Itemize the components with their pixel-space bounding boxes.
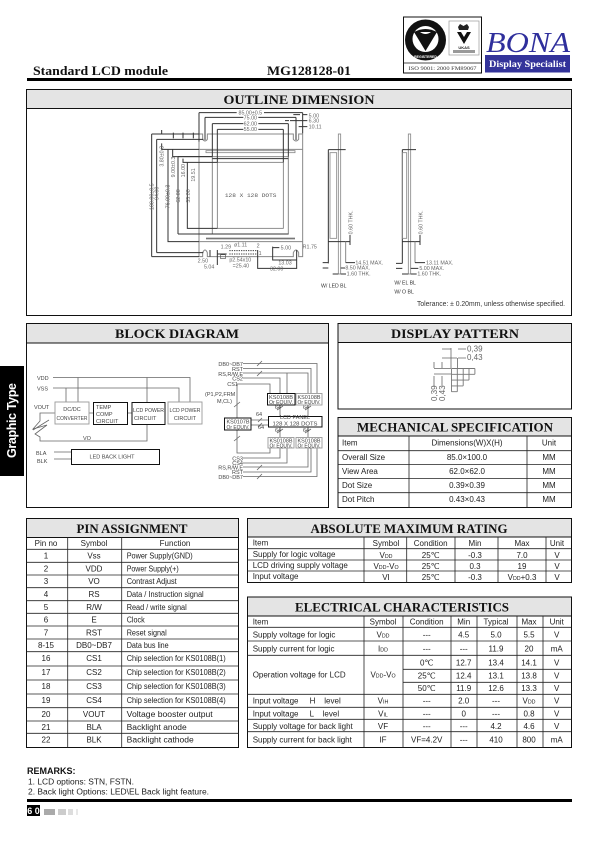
dot pattern diagram: 0,43 xyxy=(467,353,483,362)
pin table: CS4 xyxy=(86,696,102,705)
pin table: 17 xyxy=(42,668,51,677)
electrical table: Operation voltage for LCD xyxy=(253,670,346,680)
power and converter circuit: DC/DC xyxy=(63,407,81,413)
backlight circuit: BLA xyxy=(36,451,47,457)
pin table: 8-15 xyxy=(38,641,55,650)
page number tag: 6 0 xyxy=(27,806,40,816)
electrical table: 14.1 xyxy=(521,659,537,668)
pin table: BLK xyxy=(86,736,102,744)
rating table: VI xyxy=(382,573,390,582)
electrical table: V xyxy=(554,696,560,706)
driver circuit xyxy=(205,361,322,481)
driver circuit: KS0108B xyxy=(269,395,293,401)
backlight circuit xyxy=(36,450,160,465)
electrical table: VDD-VO xyxy=(370,670,396,680)
rating table: Symbol xyxy=(373,539,400,548)
electrical table: 13.3 xyxy=(521,684,537,693)
pin table: Backlight cathode xyxy=(127,736,194,744)
dot pattern diagram: 0,39 xyxy=(467,344,483,354)
heading: mechanical specification xyxy=(338,418,572,436)
electrical table: Supply current for back light xyxy=(253,736,353,744)
header title: model number: MG128128-01 xyxy=(267,64,351,78)
driver circuit: 64 xyxy=(303,405,309,411)
electrical table: VIH xyxy=(378,696,388,706)
electrical table: VDD xyxy=(376,630,390,640)
front view drawing: R1.75 xyxy=(303,244,317,250)
electrical table: 25℃ xyxy=(418,672,436,681)
side view with LED backlight: 0.60 THK. xyxy=(348,210,354,234)
panel: absolute maximum rating xyxy=(248,518,572,582)
power and converter circuit: VO xyxy=(83,436,92,442)
BONA logo: Display Specialist xyxy=(489,60,567,70)
driver circuit: Or EQUIV. xyxy=(298,400,321,406)
electrical table: 4.6 xyxy=(523,722,535,731)
heading: absolute maximum rating xyxy=(248,518,572,537)
electrical table: 12.7 xyxy=(456,659,472,668)
driver circuit: KS0108B xyxy=(298,438,321,444)
electrical table: 12.4 xyxy=(456,672,472,681)
side view with LED backlight: 1.60 THK. xyxy=(347,272,371,278)
mechanical table: 0.43×0.43 xyxy=(449,495,485,504)
pin table: 20 xyxy=(42,710,51,719)
electrical table: --- xyxy=(423,722,431,731)
side tab: graphic type xyxy=(0,366,24,476)
pin table: 5 xyxy=(44,603,49,612)
rating table: Max xyxy=(514,539,530,548)
front view drawing: 5.04 xyxy=(204,265,214,271)
electrical table: VDD xyxy=(522,696,536,706)
front view drawing: 3.80±0.3 xyxy=(159,146,165,167)
certification logo box: UKAS xyxy=(458,45,470,50)
driver circuit: RS,R/W,E xyxy=(218,372,243,378)
front view drawing: 5.00 xyxy=(281,245,291,251)
electrical table: V xyxy=(554,659,560,668)
pin table: Reset signal xyxy=(127,628,167,638)
backlight circuit: LED BACK LIGHT xyxy=(90,454,135,460)
driver circuit: DB0~DB7 xyxy=(218,362,243,368)
pin table: Vss xyxy=(87,552,101,560)
electrical table: --- xyxy=(423,630,431,640)
driver circuit: 64 xyxy=(275,405,281,411)
rating table: Unit xyxy=(550,539,565,548)
power and converter circuit: VSS xyxy=(37,386,48,392)
front view drawing: 55.00 xyxy=(186,189,192,203)
electrical table: V xyxy=(554,672,560,681)
power and converter circuit: CIRCUIT xyxy=(174,416,197,422)
mechanical table: MM xyxy=(542,467,556,476)
tolerance note: Tolerance: ± 0.20mm, unless otherwise specified. xyxy=(417,301,565,308)
front view drawing: ø1.11 xyxy=(234,243,247,249)
electrical table: Item xyxy=(253,618,269,626)
front view drawing: 1 xyxy=(259,251,262,257)
front view drawing: 19.51 xyxy=(191,168,197,182)
electrical table: 13.8 xyxy=(521,672,537,681)
driver circuit: KS0108B xyxy=(298,395,321,401)
pin table: Data bus line xyxy=(127,641,169,650)
mechanical table: Dot Pitch xyxy=(342,495,374,504)
side view with EL or no backlight: 13.11 MAX. xyxy=(426,260,453,266)
front view drawing: 5.00 xyxy=(309,113,319,119)
electrical table: 0 xyxy=(461,710,466,718)
rating table: Input voltage xyxy=(253,572,299,581)
front view drawing: 1.29 xyxy=(221,244,231,250)
electrical table: --- xyxy=(423,696,431,706)
rating table: LCD driving supply voltage xyxy=(253,561,348,570)
electrical table: V xyxy=(554,684,560,693)
pin table: Chip selection for KS0108B(4) xyxy=(127,696,226,705)
pin table: CS1 xyxy=(86,654,102,663)
heading: display pattern xyxy=(338,324,572,342)
electrical table: Input voltage H level xyxy=(253,696,341,706)
pin table: Contrast Adjust xyxy=(127,577,177,586)
mechanical table: MM xyxy=(542,453,556,462)
rating table: 25℃ xyxy=(422,573,440,582)
power and converter circuit: LCD POWER xyxy=(133,408,164,414)
heading: pin assignment xyxy=(26,518,238,538)
electrical table: --- xyxy=(492,710,500,718)
pin table: 21 xyxy=(42,723,51,732)
electrical table: 2.0 xyxy=(458,696,470,706)
pin table: E xyxy=(91,616,97,625)
front view drawing: 13.03 xyxy=(278,261,292,267)
front view drawing: 55.00 xyxy=(244,127,257,133)
dot pattern diagram: 0,43 xyxy=(438,385,447,401)
power and converter circuit: TEMP xyxy=(96,405,112,411)
electrical table: 50℃ xyxy=(418,684,436,693)
electrical table: 4.5 xyxy=(458,630,470,640)
remarks: 2. Back light Options: LED\EL Back light feature. xyxy=(28,788,209,796)
electrical table: 5.0 xyxy=(490,630,502,640)
heading: outline dimension xyxy=(26,90,572,108)
electrical table: 13.4 xyxy=(488,659,504,668)
pin table: CS3 xyxy=(86,682,102,691)
driver circuit: M,CL) xyxy=(217,399,232,405)
pin table: Read / write signal xyxy=(127,603,187,612)
rating table: 25℃ xyxy=(422,562,440,571)
pin table: DB0~DB7 xyxy=(76,641,112,650)
power and converter circuit: CIRCUIT xyxy=(134,416,157,422)
remarks: 1. LCD options: STN, FSTN. xyxy=(28,778,134,786)
pin table: Chip selection for KS0108B(1) xyxy=(127,654,226,663)
front view drawing: =25.40 xyxy=(233,263,249,269)
electrical table: mA xyxy=(551,736,563,744)
panel: outline dimension xyxy=(26,90,572,316)
front view drawing: 76.00±0.3 xyxy=(165,185,171,208)
heading: electrical characteristics xyxy=(248,597,572,616)
BONA logo xyxy=(485,27,570,72)
front view drawing: 75.00 xyxy=(244,116,257,122)
side view with EL or no backlight xyxy=(394,134,453,295)
rating table: 19 xyxy=(518,562,527,571)
electrical table: V xyxy=(554,630,560,640)
driver circuit: DB0~DB7 xyxy=(218,475,243,481)
electrical table: 800 xyxy=(522,736,536,744)
front view drawing: 85.00±0.5 xyxy=(238,110,262,116)
rating table: Item xyxy=(253,538,269,548)
rating table: Supply for logic voltage xyxy=(253,550,336,559)
rating table xyxy=(253,538,565,582)
electrical table: Supply voltage for back light xyxy=(253,722,354,731)
pin table: Power Supply(GND) xyxy=(127,552,193,560)
header title: product type: Standard LCD module xyxy=(33,64,168,78)
electrical table: Symbol xyxy=(370,618,397,626)
electrical table: Min xyxy=(457,618,470,626)
panel: pin assignment xyxy=(26,518,238,748)
electrical table: 0℃ xyxy=(420,659,433,668)
power and converter circuit xyxy=(33,376,202,442)
mechanical table: Dot Size xyxy=(342,481,373,490)
side view with EL or no backlight: 5.00 MAX. xyxy=(419,266,444,272)
electrical table: 0.8 xyxy=(523,710,535,718)
driver circuit: CS2 xyxy=(232,376,243,382)
pin table: Voltage booster output xyxy=(127,710,214,719)
mechanical table: Unit xyxy=(542,438,557,447)
electrical table: 410 xyxy=(489,736,503,744)
electrical table: 11.9 xyxy=(456,684,472,693)
driver circuit: RST xyxy=(232,470,244,476)
driver circuit: Or EQUIV. xyxy=(270,443,293,449)
front view drawing: 2 xyxy=(257,244,260,250)
heading: block diagram xyxy=(26,324,328,343)
side view with LED backlight xyxy=(321,134,383,289)
side view with LED backlight: W/ LED BL xyxy=(321,283,347,289)
mechanical table: Item xyxy=(342,438,358,447)
backlight circuit: BLK xyxy=(37,459,48,465)
driver circuit: Or EQUIV. xyxy=(226,425,250,431)
panel: display pattern xyxy=(338,324,572,409)
mechanical table: 85.0×100.0 xyxy=(447,453,488,462)
driver circuit: KS0107B xyxy=(226,420,250,426)
driver circuit: RST xyxy=(232,367,244,373)
front view drawing: 6.30 xyxy=(309,119,319,125)
pin table: 18 xyxy=(42,682,51,691)
driver circuit: 128 X 128 DOTS xyxy=(272,422,318,428)
pin table: RS xyxy=(88,590,100,599)
pin table: Chip selection for KS0108B(3) xyxy=(127,682,226,691)
front view drawing: 100.00±0.5 xyxy=(150,183,156,210)
pin table xyxy=(35,539,226,744)
heading: block diagram: BLOCK DIAGRAM xyxy=(115,326,239,341)
electrical table: Supply voltage for logic xyxy=(253,630,335,640)
pin table: VDD xyxy=(86,564,103,574)
side view with LED backlight: 8.50 MAX. xyxy=(345,266,370,272)
driver circuit: LCD PANEL xyxy=(280,415,310,421)
rating table: -0.3 xyxy=(468,573,482,582)
front view drawing: 9.00±0.3 xyxy=(171,157,177,177)
front view drawing xyxy=(150,110,322,272)
mechanical table: View Area xyxy=(342,467,378,476)
driver circuit: 64 xyxy=(275,428,281,434)
pin table: Function xyxy=(160,539,190,548)
electrical table: Supply current for logic xyxy=(253,644,335,654)
driver circuit: (P1,P2,FRM xyxy=(205,392,236,398)
footer colour blocks xyxy=(44,809,78,815)
pin table: Symbol xyxy=(81,539,108,548)
heading: electrical characteristics: ELECTRICAL CHARACTERISTICS xyxy=(295,600,509,614)
pin table: 3 xyxy=(44,577,49,586)
electrical table: Input voltage L level xyxy=(253,710,339,718)
electrical table: 11.9 xyxy=(489,644,504,654)
mechanical table: Overall Size xyxy=(342,453,386,462)
pin table: VO xyxy=(88,577,100,586)
mechanical table: MM xyxy=(542,495,556,504)
dot pattern diagram: 0,39 xyxy=(430,385,439,401)
rating table: Min xyxy=(469,539,481,548)
driver circuit: Or EQUIV. xyxy=(298,443,321,449)
side view with EL or no backlight: W/ EL BL xyxy=(394,280,416,286)
electrical table: --- xyxy=(492,696,500,706)
electrical table: 4.2 xyxy=(490,722,502,731)
electrical table: mA xyxy=(551,644,563,654)
dot pattern diagram xyxy=(430,344,483,401)
side view with EL or no backlight: 0.60 THK. xyxy=(418,210,424,234)
electrical table: V xyxy=(554,710,560,718)
front view drawing: 128 X 128 DOTS xyxy=(225,192,277,199)
electrical table: --- xyxy=(460,736,468,744)
pin table: RST xyxy=(86,628,102,638)
driver circuit: CS1 xyxy=(227,382,238,388)
mechanical table: MM xyxy=(542,481,556,490)
side view with LED backlight: 14.51 MAX. xyxy=(355,260,383,266)
driver circuit: CS4 xyxy=(232,461,243,467)
certification logo box: REGISTERED xyxy=(414,55,437,59)
pin table: 22 xyxy=(42,736,51,744)
electrical table: 13.1 xyxy=(488,672,504,681)
driver circuit: CS3 xyxy=(232,456,243,462)
remarks xyxy=(27,766,209,796)
electrical table: Max xyxy=(521,618,537,626)
rating table: Condition xyxy=(414,539,448,548)
driver circuit: 64 xyxy=(258,425,264,431)
pin table: Power Supply(+) xyxy=(127,564,179,574)
panel: electrical characteristics xyxy=(248,597,572,748)
rating table: VDD+0.3 xyxy=(508,573,537,582)
pin table: 7 xyxy=(44,628,49,638)
pin table: 19 xyxy=(42,696,51,705)
rating table: 25℃ xyxy=(422,551,440,560)
rating table: V xyxy=(554,551,560,560)
front view drawing: 62.00 xyxy=(244,121,257,127)
electrical table xyxy=(253,618,565,744)
certification logo box xyxy=(404,17,482,73)
driver circuit: KS0108B xyxy=(270,438,293,444)
electrical table: 20 xyxy=(525,644,534,654)
electrical table: --- xyxy=(423,644,431,654)
header rule xyxy=(27,78,572,81)
pin table: Clock xyxy=(127,616,146,625)
pin table: Backlight anode xyxy=(127,723,187,732)
pin table: BLA xyxy=(86,723,102,732)
electrical table: V xyxy=(554,722,560,731)
pin table: 6 xyxy=(44,616,49,625)
power and converter circuit: COMP xyxy=(96,412,113,418)
electrical table: 12.6 xyxy=(488,684,504,693)
electrical table: Condition xyxy=(410,618,444,626)
mechanical table: 0.39×0.39 xyxy=(449,481,485,490)
electrical table: Typical xyxy=(484,618,509,626)
front view drawing: 32.00 xyxy=(270,266,283,272)
heading: pin assignment: PIN ASSIGNMENT xyxy=(76,521,188,536)
electrical table: VIL xyxy=(378,710,388,718)
pin table: VOUT xyxy=(83,710,105,719)
rating table: VDD xyxy=(380,551,393,560)
BONA logo: BONA xyxy=(486,27,570,59)
heading: absolute maximum rating: ABSOLUTE MAXIMUM RATING xyxy=(310,521,508,536)
electrical table: --- xyxy=(423,710,431,718)
front view drawing: 94.00 xyxy=(155,187,161,200)
pin table: 4 xyxy=(44,590,49,599)
rating table: -0.3 xyxy=(468,551,482,560)
pin table: CS2 xyxy=(86,668,102,677)
rating table: VDD-VO xyxy=(373,562,399,571)
panel: block diagram xyxy=(26,324,328,508)
mechanical table xyxy=(342,438,557,504)
heading: outline dimension: OUTLINE DIMENSION xyxy=(224,92,375,107)
electrical table: --- xyxy=(460,722,468,731)
pin table: Data / Instruction signal xyxy=(127,590,204,599)
electrical table: Unit xyxy=(550,618,565,626)
front view drawing: 2.50 xyxy=(198,259,208,265)
pin table: 16 xyxy=(42,654,51,663)
power and converter circuit: VDD xyxy=(37,376,49,382)
mechanical table: 62.0×62.0 xyxy=(449,467,485,476)
driver circuit: RS,R/W,E xyxy=(218,466,243,472)
heading: mechanical specification: MECHANICAL SPECIFICATION xyxy=(357,420,554,434)
pin table: Pin no xyxy=(35,539,58,548)
rating table: V xyxy=(554,562,560,571)
heading: display pattern: DISPLAY PATTERN xyxy=(391,326,520,341)
driver circuit: 64 xyxy=(256,412,262,418)
electrical table: IDD xyxy=(378,644,388,654)
electrical table: IF xyxy=(379,736,387,744)
front view drawing: 16.00 xyxy=(181,164,187,177)
pin table: R/W xyxy=(86,603,102,612)
electrical table: VF=4.2V xyxy=(411,736,443,744)
front view drawing: 10.11 xyxy=(309,124,322,130)
mechanical table: Dimensions(W)X(H) xyxy=(431,438,503,447)
driver circuit: 64 xyxy=(303,428,309,434)
side view with EL or no backlight: W/ O BL xyxy=(394,289,414,295)
electrical table: 5.5 xyxy=(523,630,535,640)
power and converter circuit: CONVERTER xyxy=(56,416,88,422)
rating table: V xyxy=(554,573,560,582)
front view drawing: p2.54x10 xyxy=(229,258,251,264)
rating table: 7.0 xyxy=(516,551,528,560)
electrical table: --- xyxy=(460,644,468,654)
certification logo box: ISO 9001: 2000 FM89067 xyxy=(408,66,477,72)
pin table: 2 xyxy=(44,564,49,574)
remarks: REMARKS: xyxy=(27,766,76,776)
side view with EL or no backlight: 1.60 THK. xyxy=(417,272,441,278)
panel: mechanical specification xyxy=(338,418,572,508)
side tab: graphic type: Graphic Type xyxy=(5,383,19,458)
power and converter circuit: CIRCUIT xyxy=(96,419,119,425)
driver circuit: Or EQUIV. xyxy=(269,400,293,406)
rating table: 0.3 xyxy=(469,562,481,571)
power and converter circuit: VOUT xyxy=(34,405,50,411)
pin table: 1 xyxy=(44,552,49,560)
front view drawing: 62.00 xyxy=(176,189,182,203)
electrical table: VF xyxy=(378,722,388,731)
pin table: Chip selection for KS0108B(2) xyxy=(127,668,226,677)
footer rule xyxy=(27,799,572,802)
power and converter circuit: LCD POWER xyxy=(170,408,201,414)
